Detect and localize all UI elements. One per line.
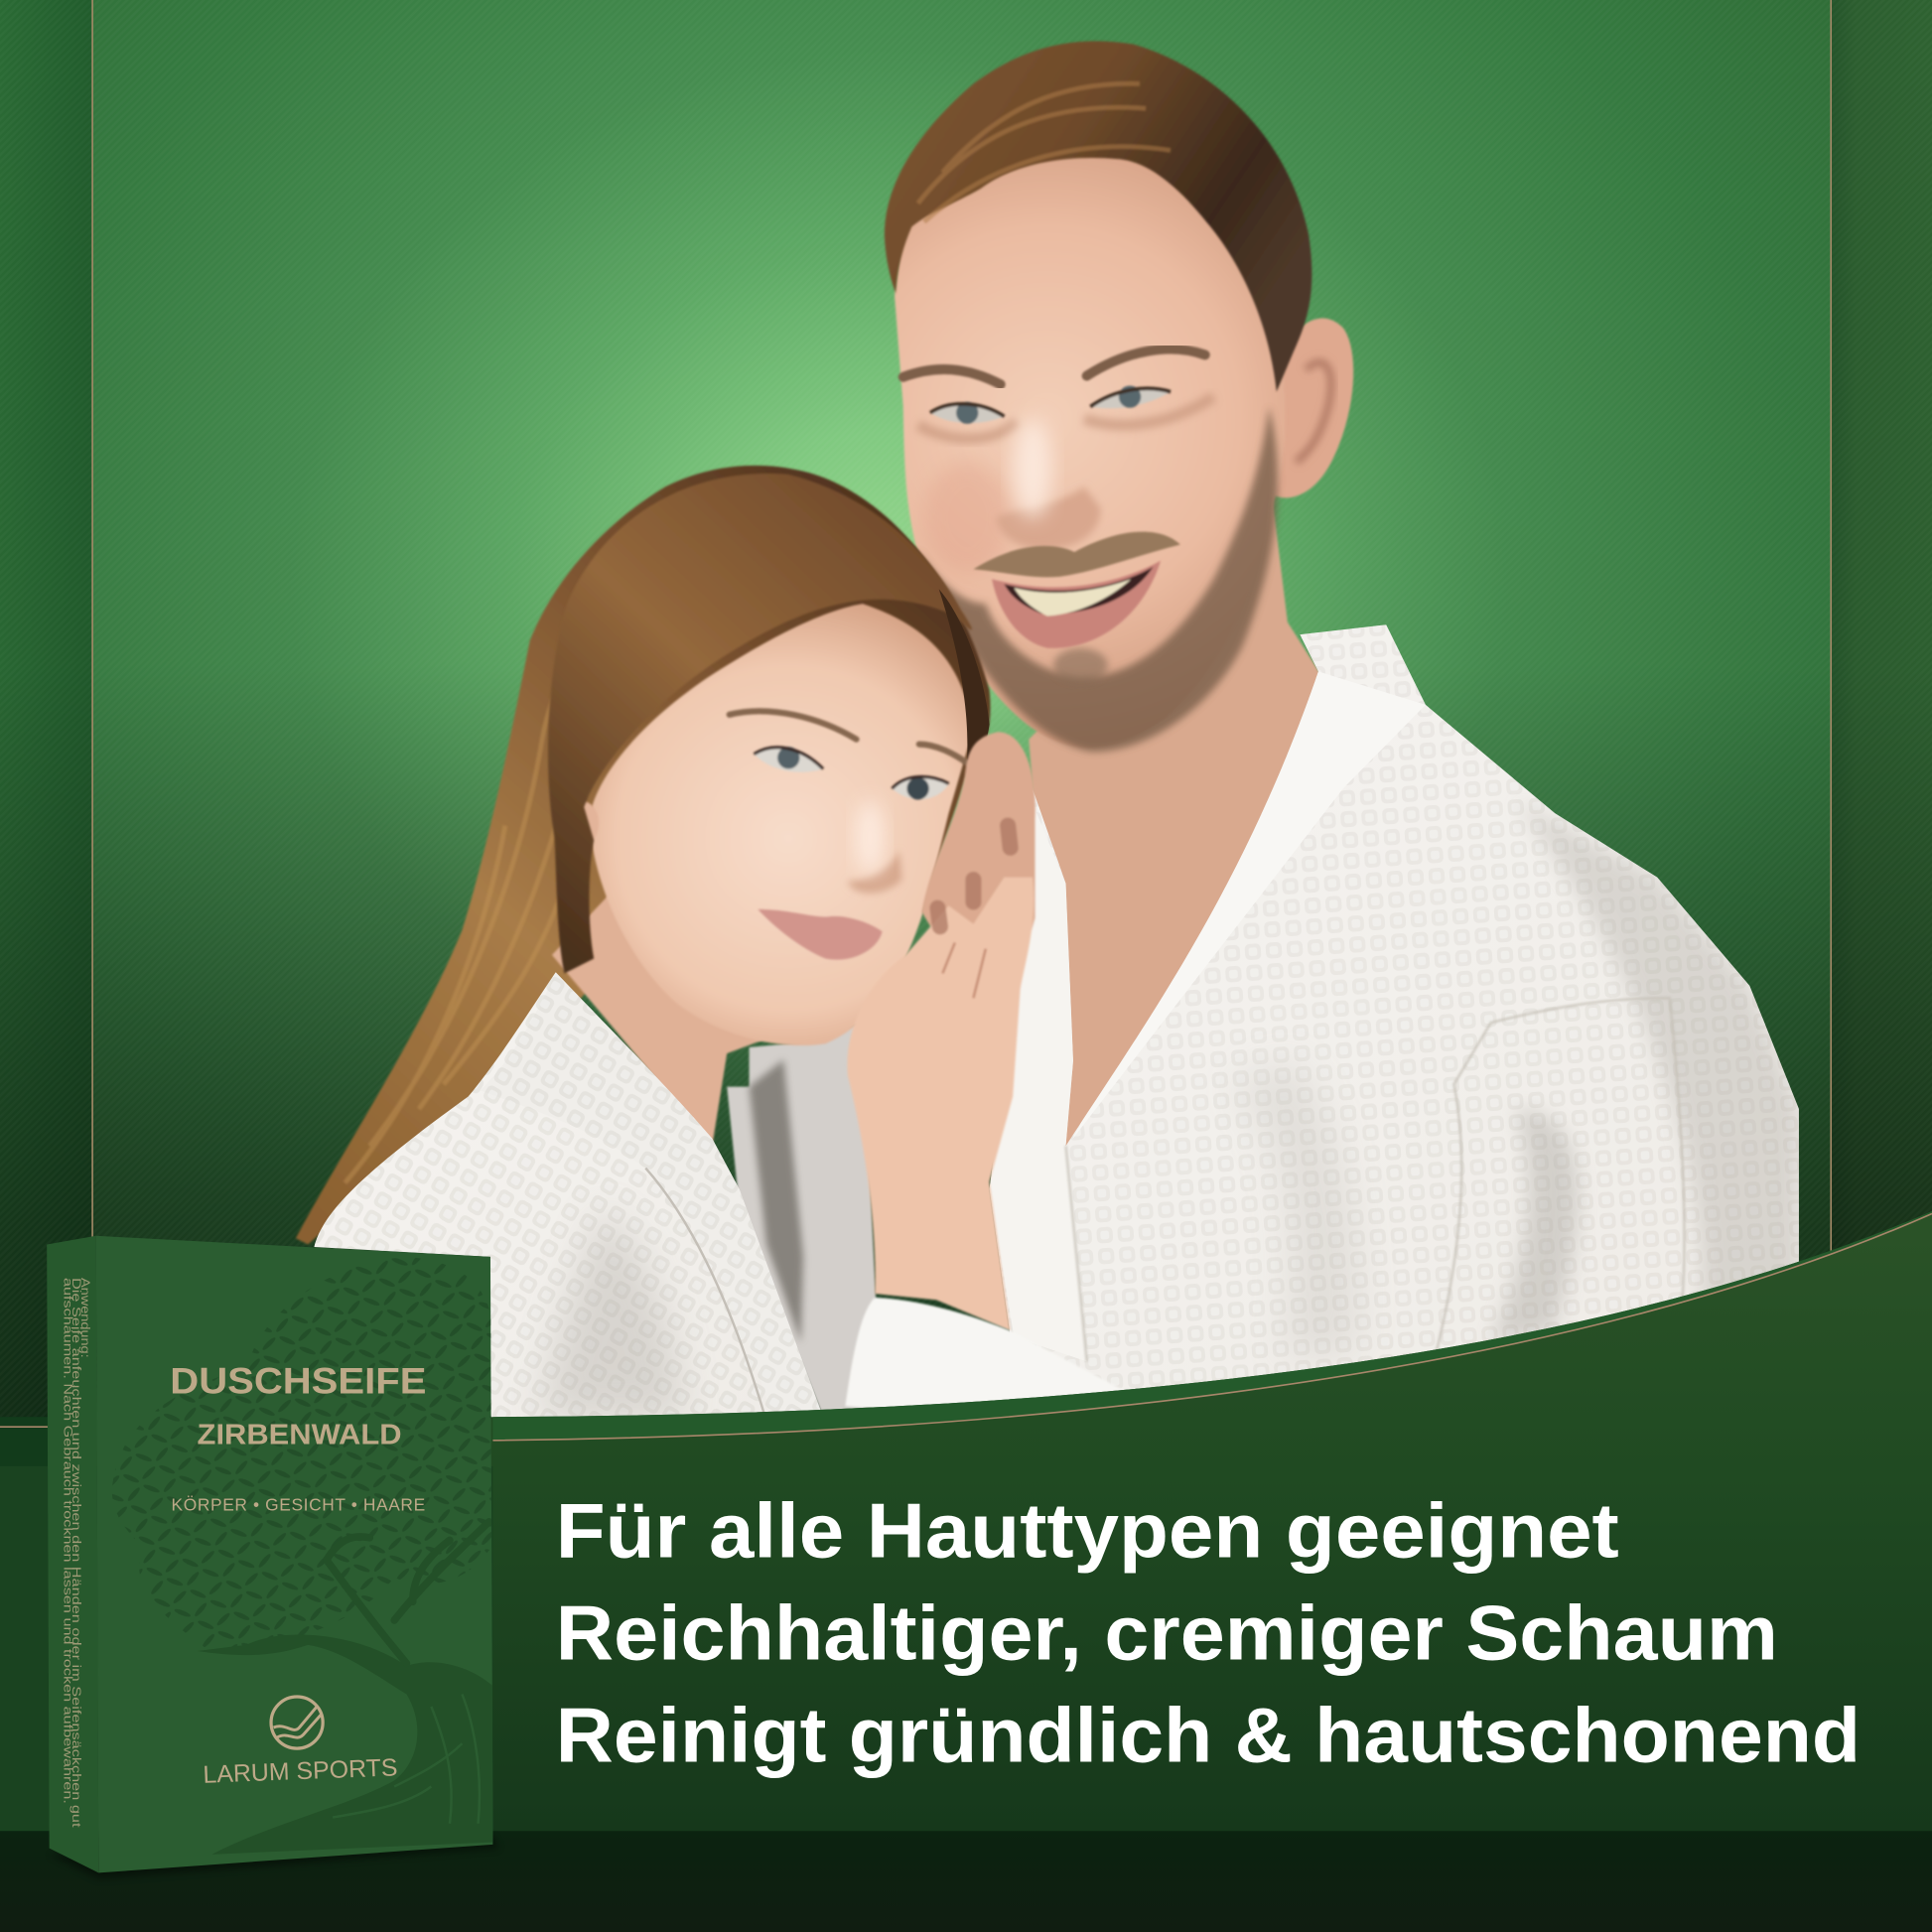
box front panel bbox=[96, 1236, 492, 1872]
woman: front hair bbox=[548, 474, 972, 973]
woman: hair behind bbox=[296, 466, 991, 1244]
trunk and branches bbox=[198, 1634, 495, 1855]
man: beard bbox=[918, 407, 1278, 752]
man: mouth bbox=[992, 561, 1161, 648]
box subtitle: ZIRBENWALD bbox=[198, 1420, 402, 1451]
woman: face bbox=[589, 604, 968, 1045]
woman: neck bbox=[552, 888, 776, 1146]
box uses: KÖRPER • GESICHT • HAARE bbox=[172, 1495, 425, 1515]
side panel usage text bbox=[62, 1278, 92, 1828]
man: nose bbox=[996, 486, 1100, 550]
product box bbox=[47, 1236, 499, 1879]
bottom panel with curved edge bbox=[0, 1211, 1932, 1932]
panel body bbox=[0, 1211, 1932, 1834]
icon: brand logo bbox=[271, 1697, 323, 1748]
woman: hair strands bbox=[345, 492, 826, 1182]
woman: hair by temple bbox=[939, 589, 990, 773]
woman: fingernails bbox=[937, 826, 1011, 926]
side panel usage text: Die Seife anfeuchten und zwischen den Händen oder im Seifensäckchen gut bbox=[69, 1278, 83, 1828]
man: hair bbox=[885, 41, 1311, 392]
woman: eyebrows bbox=[730, 711, 968, 763]
woman: robe shadow strip bbox=[750, 1059, 803, 1343]
man: head bbox=[885, 41, 1353, 752]
photo: couple in white bathrobes bbox=[296, 41, 1824, 1442]
side panel usage text: Anwendung: bbox=[78, 1278, 92, 1358]
woman: background shoulder of robe bbox=[727, 1023, 881, 1417]
woman: robe bbox=[314, 972, 820, 1418]
tree illustration bbox=[112, 1257, 495, 1855]
benefit line 2: Reichhaltiger, cremiger Schaum bbox=[556, 1589, 1778, 1677]
headline benefits bbox=[556, 1487, 1861, 1779]
woman: hand and forearm bbox=[847, 878, 1034, 1330]
foliage bbox=[112, 1257, 495, 1651]
box shadow bbox=[50, 1836, 499, 1879]
benefit line 3: Reinigt gründlich & hautschonend bbox=[556, 1692, 1861, 1779]
man: neck bbox=[1029, 492, 1330, 1159]
man: face bbox=[895, 123, 1286, 748]
woman: lips bbox=[758, 909, 883, 960]
woman: sleeve bbox=[845, 1298, 1130, 1420]
man: cheek blush bbox=[924, 462, 1011, 573]
box side panel bbox=[47, 1236, 98, 1872]
man: eyes bbox=[930, 385, 1171, 424]
woman: arm and hand bbox=[847, 732, 1035, 1330]
man: ear bbox=[1269, 318, 1353, 497]
woman: fingers bbox=[921, 732, 1035, 1059]
man: eye shadows bbox=[918, 397, 1213, 439]
woman: nose bbox=[848, 850, 901, 893]
side panel usage text: aufschäumen. Nach Gebrauch trocknen lassen und trocken aufbewahren. bbox=[62, 1278, 75, 1804]
man: robe bbox=[989, 624, 1799, 1390]
man: moustache bbox=[973, 532, 1180, 577]
brand name: LARUM SPORTS bbox=[203, 1754, 398, 1789]
benefit line 1: Für alle Hauttypen geeignet bbox=[556, 1487, 1619, 1575]
man: soul patch bbox=[1053, 648, 1108, 683]
woman: eyes bbox=[755, 747, 949, 799]
woman: ear bbox=[564, 801, 599, 845]
box title: DUSCHSEIFE bbox=[170, 1360, 426, 1402]
man: eyebrows bbox=[903, 349, 1205, 384]
